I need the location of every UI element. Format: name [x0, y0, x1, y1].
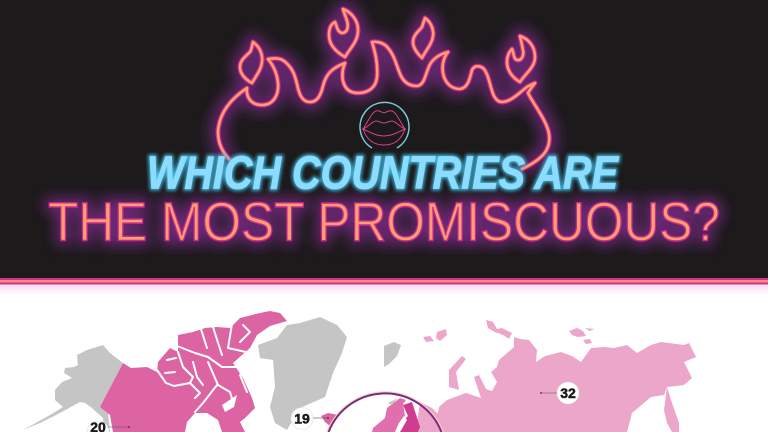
map: Iceland: [321, 413, 338, 426]
map: Norway and Sweden: [372, 398, 406, 432]
world map: [23, 311, 696, 432]
flame glow: [218, 9, 549, 169]
map: gulf: [395, 416, 407, 432]
map: Greenland: [258, 317, 347, 430]
header panel: [0, 0, 768, 279]
neon flame outline: [218, 9, 549, 169]
map: Canadian channels: [157, 324, 257, 412]
label: Iceland 19: [291, 408, 329, 430]
map: Svalbard: [384, 342, 401, 367]
neon divider line: [0, 278, 768, 296]
icon: lips in a circle: [360, 102, 409, 148]
map: Finland: [398, 402, 420, 432]
title line 1 glow: WHICH COUNTRIES ARE: [147, 146, 619, 198]
map: Arctic coast fleck: [388, 398, 398, 405]
map: Canada: [100, 311, 287, 432]
label: Russia 32: [540, 382, 579, 404]
map: Hudson Bay: [185, 395, 237, 432]
Europe inset ring: [327, 392, 443, 432]
title line 1: WHICH COUNTRIES ARE: [147, 146, 619, 198]
label: Iceland 19: 19: [294, 410, 310, 426]
map: Alaska: [23, 345, 123, 432]
map: Russia: [416, 320, 696, 432]
label: Canada 20: [87, 419, 130, 432]
label: Russia 32: 32: [560, 385, 576, 401]
